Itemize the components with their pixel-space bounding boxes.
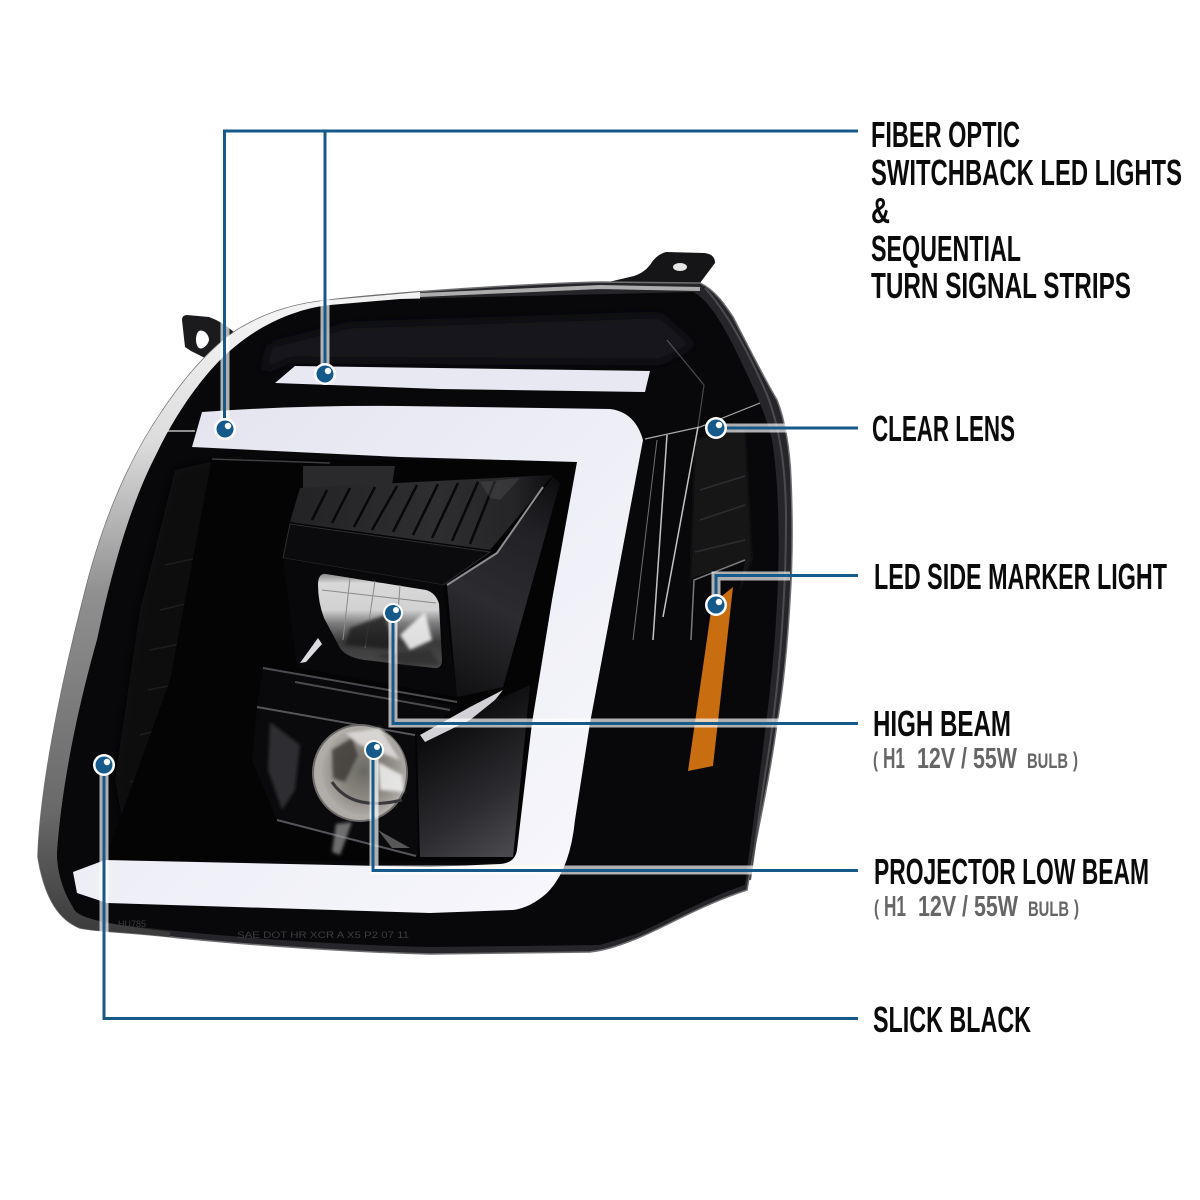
top mounting bracket — [600, 252, 715, 284]
callout marker: slick black — [93, 754, 115, 776]
label: high beam: HIGH BEAM — [873, 703, 1011, 744]
line halos over the photo — [104, 295, 790, 935]
callout lines — [104, 131, 858, 1018]
right lower glossy wedge — [417, 685, 530, 857]
label: high beam: BULB — [1027, 750, 1068, 773]
label: fiber optic — [871, 114, 1182, 306]
top rim light band — [420, 287, 700, 295]
lower lens markings: HU785 — [118, 919, 146, 929]
label: projector low beam: BULB — [1028, 898, 1069, 921]
label: high beam: 12V / 55W — [917, 743, 1017, 775]
callout marker: main strip — [214, 418, 236, 440]
marker top glossy edge — [691, 560, 745, 640]
label: high beam — [873, 703, 1078, 775]
callout marker: clear lens — [705, 417, 727, 439]
label: slick black: SLICK BLACK — [873, 999, 1031, 1040]
black shelf above high beam — [283, 524, 490, 585]
right side reflective strips — [163, 340, 760, 640]
label: projector low beam: ) — [1074, 897, 1079, 920]
label: high beam: ) — [1073, 749, 1078, 772]
lower lens markings: SAE DOT HR XCR A X5 P2 07 11 — [237, 930, 409, 940]
fiber optic upper strip — [275, 366, 650, 392]
label: high beam: H1 — [883, 743, 905, 775]
amber side marker light — [688, 587, 733, 771]
label: fiber optic: FIBER OPTIC — [871, 114, 1020, 155]
white triangular glint — [300, 638, 322, 663]
divider trim between modules — [257, 668, 460, 733]
blue leader lines — [104, 131, 858, 1018]
low beam projector lens — [313, 725, 407, 821]
label: projector low beam: H1 — [884, 891, 906, 923]
lower lens markings — [118, 919, 409, 940]
high beam bezel — [283, 558, 457, 697]
label: fiber optic: SEQUENTIAL — [871, 228, 1021, 269]
callout marker: high beam — [383, 603, 403, 623]
low beam housing — [252, 707, 418, 857]
label: clear lens: CLEAR LENS — [872, 408, 1015, 449]
glossy black wedge — [447, 477, 560, 697]
ribbed upper shroud — [290, 466, 553, 550]
callout marker: upper strip — [314, 363, 336, 385]
black inner housing — [57, 292, 779, 947]
right rim grey lines — [705, 288, 786, 880]
label: projector low beam — [874, 851, 1149, 923]
label: high beam: ( — [873, 749, 878, 772]
translucent left rim band — [38, 292, 420, 937]
lens housing outer shell — [38, 282, 792, 954]
label: projector low beam: 12V / 55W — [918, 891, 1018, 923]
label: fiber optic: & — [871, 190, 890, 231]
callout marker: side marker — [705, 594, 727, 616]
louver lines — [130, 552, 250, 818]
left mounting bracket — [182, 315, 235, 358]
headlight assembly — [38, 252, 792, 954]
inner headlamp window — [105, 458, 575, 862]
bracket hole — [673, 263, 687, 271]
upper interior shade — [262, 315, 695, 372]
bright chrome streak — [420, 690, 503, 742]
window trim highlight — [212, 459, 330, 463]
right louver panel — [690, 425, 752, 590]
amber marker surround — [672, 560, 745, 790]
high beam reflector — [318, 574, 442, 668]
left louver panel — [115, 455, 290, 860]
callout marker: low beam — [364, 740, 384, 760]
label: projector low beam: ( — [874, 897, 879, 920]
wedge highlight — [447, 487, 543, 585]
fiber optic C-shaped LED strip — [73, 406, 643, 913]
